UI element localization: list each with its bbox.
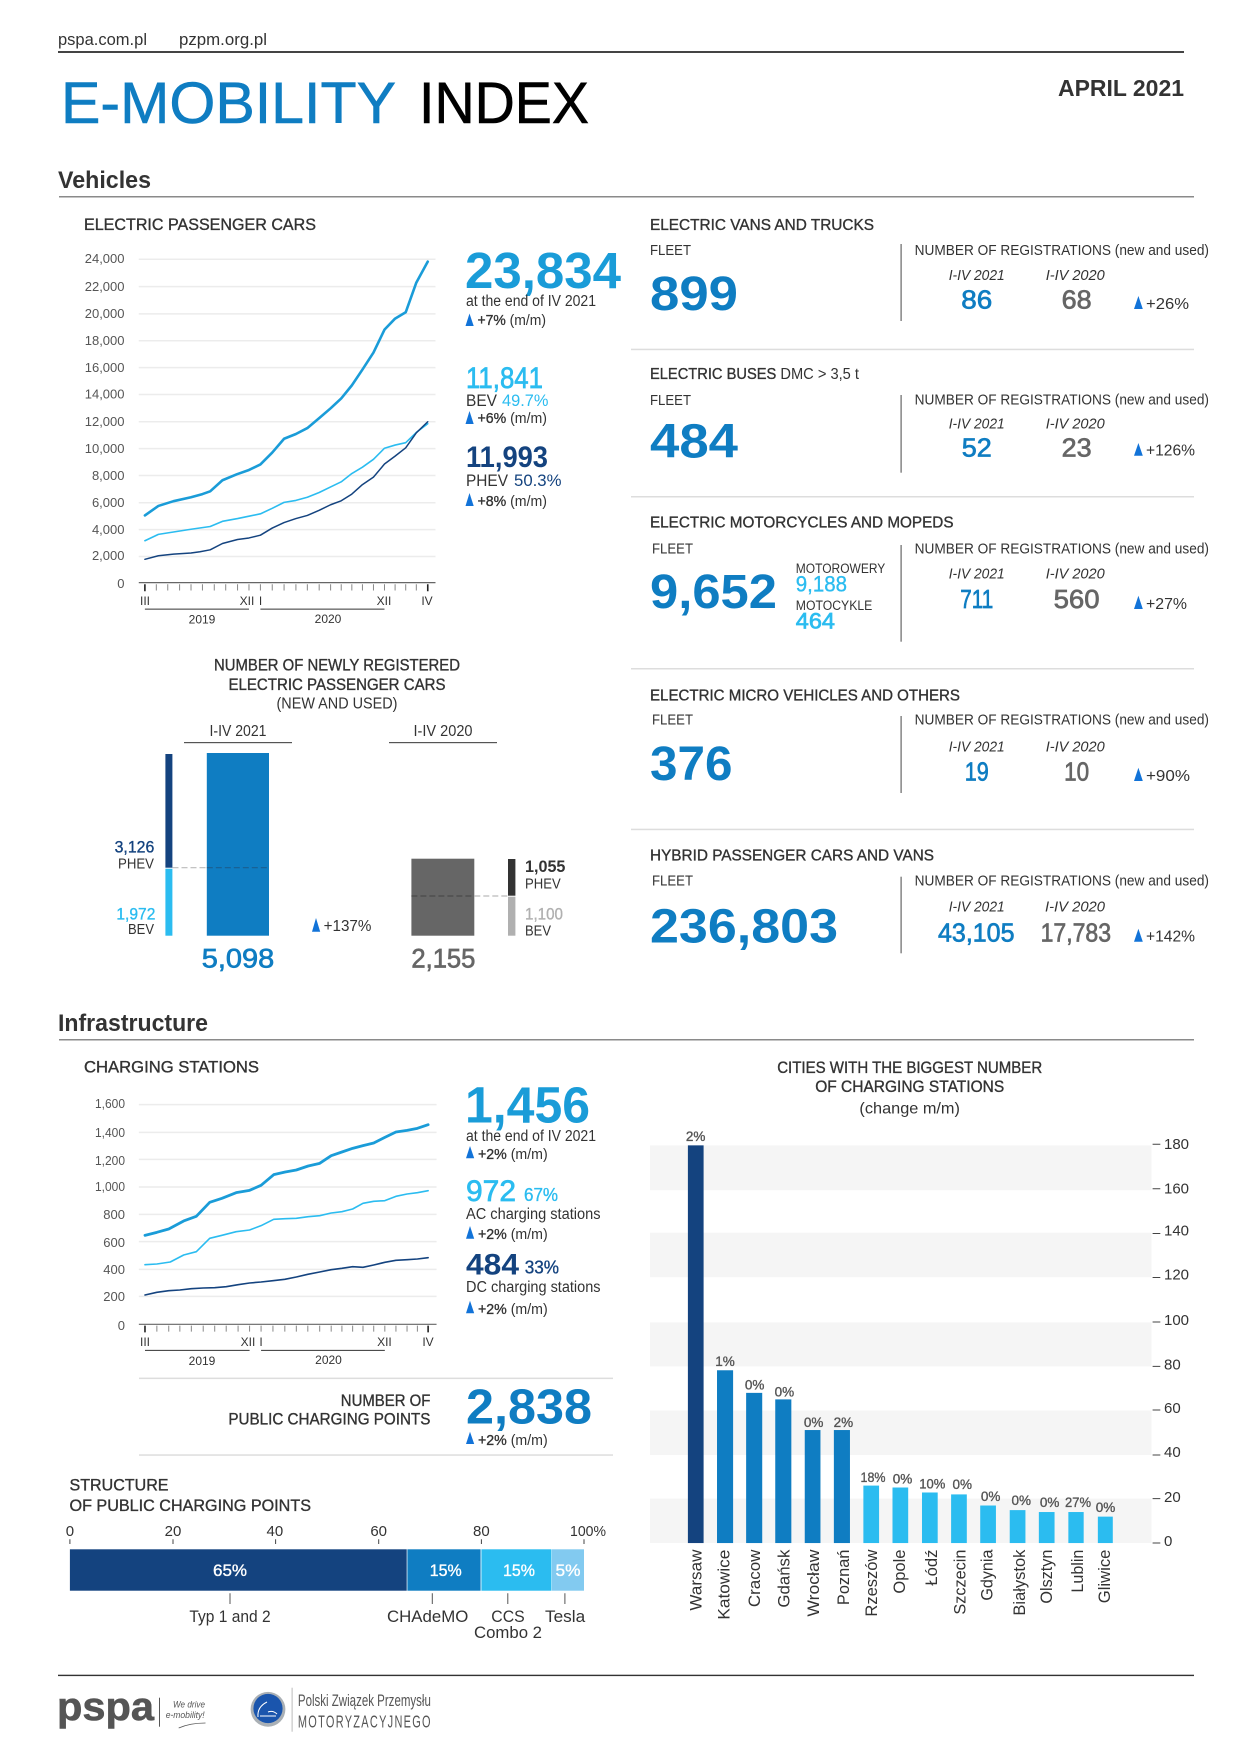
line chart: passenger car fleet: XII bbox=[240, 594, 254, 608]
stat: DC stations 484: +2% (m/m) bbox=[478, 1301, 548, 1318]
line chart: passenger car fleet: XII bbox=[377, 594, 391, 608]
panel: public charging points: PUBLIC CHARGING POINTS bbox=[228, 1410, 430, 1428]
bar chart: cities: Wrocław bbox=[805, 1550, 823, 1617]
heading: newly registered: (NEW AND USED) bbox=[276, 696, 398, 713]
panel: electric vans and trucks: 86 bbox=[961, 284, 992, 314]
bar chart: cities: 0% bbox=[893, 1472, 912, 1487]
panel: electric micro vehicles: FLEET bbox=[652, 712, 693, 728]
bar chart: cities bbox=[650, 1129, 1189, 1620]
stat: BEV 11,841: 49.7% bbox=[502, 392, 549, 410]
panel: electric motorcycles and mopeds: 464 bbox=[796, 609, 835, 634]
panel: electric buses: 23 bbox=[1062, 433, 1092, 463]
bar chart: cities: Łódź bbox=[923, 1550, 941, 1586]
panel: public charging points: NUMBER OF bbox=[341, 1392, 430, 1410]
axis: percent scale: 0 bbox=[66, 1523, 74, 1540]
stat: total stations 1,456 bbox=[465, 1077, 596, 1163]
bar chart: cities: Cracow bbox=[746, 1550, 764, 1607]
panel: hybrid passenger cars and vans: NUMBER OF REGISTRATIONS (new and used) bbox=[915, 872, 1209, 890]
bar chart: cities: 0% bbox=[1096, 1500, 1115, 1515]
bar chart: cities: 40 bbox=[1164, 1444, 1181, 1461]
axis: percent scale: 20 bbox=[165, 1523, 181, 1540]
panel: electric buses: FLEET bbox=[650, 392, 691, 409]
bar labels: Tesla bbox=[545, 1607, 586, 1626]
line chart: passenger car fleet: 24,000 bbox=[85, 251, 124, 266]
panel: electric motorcycles and mopeds: +27% bbox=[1146, 596, 1187, 613]
line chart: charging stations: XII bbox=[241, 1335, 255, 1349]
bar chart: cities: 80 bbox=[1164, 1357, 1181, 1374]
change: +137%: +137% bbox=[324, 918, 371, 935]
panel: structure of public charging points bbox=[66, 1477, 606, 1642]
bar: 2020 registrations: 2,155 bbox=[411, 944, 475, 974]
bar chart: cities: 60 bbox=[1164, 1400, 1181, 1417]
stat: PHEV 11,993: +8% (m/m) bbox=[478, 493, 547, 510]
panel: electric buses: I-IV 2021 bbox=[949, 416, 1005, 432]
line chart: charging stations: 200 bbox=[103, 1289, 125, 1304]
panel: electric vans and trucks: 68 bbox=[1062, 284, 1092, 314]
line chart: passenger car fleet: III bbox=[140, 594, 150, 608]
bar chart: cities: Lublin bbox=[1069, 1550, 1087, 1593]
bar chart: cities: Gdynia bbox=[978, 1549, 996, 1601]
stat: total fleet 23,834: 23,834 bbox=[465, 242, 622, 299]
panel: electric motorcycles and mopeds: I-IV 2021 bbox=[949, 566, 1005, 582]
bar chart: cities: 140 bbox=[1164, 1223, 1189, 1240]
stat: total stations 1,456: 1,456 bbox=[465, 1077, 590, 1134]
line chart: charging stations: 400 bbox=[103, 1262, 125, 1277]
logo: pspa: We drive bbox=[173, 1700, 205, 1710]
stat: total fleet 23,834 bbox=[465, 242, 622, 329]
panel: hybrid passenger cars and vans: I-IV 2020 bbox=[1045, 898, 1106, 916]
panel: electric buses: 484 bbox=[650, 416, 738, 469]
bar chart: cities: Gdańsk bbox=[775, 1549, 793, 1608]
stacked bar: 65% bbox=[213, 1561, 247, 1580]
stat: PHEV 11,993 bbox=[466, 441, 562, 510]
panel: electric micro vehicles: I-IV 2021 bbox=[949, 738, 1005, 756]
bar chart: cities: 120 bbox=[1164, 1267, 1189, 1284]
panel: electric vans and trucks: I-IV 2020 bbox=[1046, 267, 1105, 284]
panel: electric micro vehicles bbox=[650, 688, 1209, 793]
panel: electric buses: 52 bbox=[962, 433, 992, 463]
header links bbox=[58, 31, 267, 49]
panel: electric micro vehicles: 376 bbox=[650, 738, 732, 791]
bar chart: cities: 1% bbox=[715, 1354, 735, 1369]
heading: vehicles: Vehicles bbox=[58, 167, 151, 194]
bar chart: cities: 0% bbox=[981, 1489, 1000, 1504]
line chart: charging stations: XII bbox=[377, 1335, 392, 1349]
line chart: passenger car fleet: 18,000 bbox=[85, 333, 124, 348]
bar chart: cities: 20 bbox=[1164, 1489, 1181, 1506]
panel: electric buses: ELECTRIC BUSES DMC > 3,5 t bbox=[650, 366, 860, 383]
panel: electric motorcycles and mopeds: FLEET bbox=[652, 540, 693, 558]
line chart: passenger car fleet: 0 bbox=[117, 576, 124, 591]
bar chart: cities: 160 bbox=[1164, 1180, 1189, 1198]
bar chart: cities: Opole bbox=[891, 1550, 909, 1594]
stacked bar: 15% bbox=[430, 1561, 462, 1580]
bar: 2021 registrations: BEV bbox=[128, 921, 154, 938]
panel: electric micro vehicles: NUMBER OF REGISTRATIONS (new and used) bbox=[915, 712, 1209, 728]
date: APRIL 2021 bbox=[1058, 75, 1184, 101]
stacked bar: 5% bbox=[556, 1561, 580, 1580]
bar chart: cities: 0% bbox=[1040, 1495, 1059, 1510]
logo: Polski Związek Przemysłu Motoryzacyjnego bbox=[251, 1688, 431, 1733]
line chart: passenger car fleet: 2020 bbox=[315, 612, 342, 626]
stat: BEV 11,841: BEV bbox=[466, 392, 497, 410]
panel: electric buses: I-IV 2020 bbox=[1046, 416, 1105, 432]
line chart: passenger car fleet: 2019 bbox=[189, 612, 216, 626]
axis: percent scale bbox=[66, 1523, 606, 1544]
line chart: charging stations: IV bbox=[422, 1335, 434, 1349]
line chart: passenger car fleet: 10,000 bbox=[85, 441, 124, 456]
panel: electric motorcycles and mopeds: MOTOCYKLE bbox=[796, 598, 872, 613]
panel: electric motorcycles and mopeds: I-IV 2020 bbox=[1046, 566, 1105, 582]
axis: percent scale: 60 bbox=[370, 1523, 387, 1540]
line chart: passenger car fleet: 8,000 bbox=[92, 468, 124, 483]
heading: charging stations: CHARGING STATIONS bbox=[84, 1059, 259, 1077]
logo: pspa: pspa bbox=[57, 1685, 155, 1729]
panel: electric motorcycles and mopeds: ELECTRIC MOTORCYCLES AND MOPEDS bbox=[650, 514, 954, 532]
bar chart: cities: Szczecin bbox=[952, 1550, 970, 1615]
stat: AC stations 972: 67% bbox=[524, 1185, 558, 1205]
panel: electric micro vehicles: 10 bbox=[1064, 757, 1089, 787]
panel: hybrid passenger cars and vans: I-IV 2021 bbox=[949, 898, 1005, 916]
line chart: charging stations: 2020 bbox=[315, 1353, 342, 1367]
stat: DC stations 484: DC charging stations bbox=[466, 1279, 601, 1296]
panel: electric buses bbox=[650, 366, 1209, 473]
panel: hybrid passenger cars and vans: 236,803 bbox=[650, 900, 838, 954]
heading: structure: STRUCTURE bbox=[70, 1477, 168, 1495]
bar: 2021 registrations: 1,972 bbox=[116, 904, 155, 923]
bar chart: cities: Poznań bbox=[835, 1550, 853, 1605]
panel: hybrid passenger cars and vans: +142% bbox=[1146, 929, 1195, 946]
header links: pzpm.org.pl bbox=[179, 31, 267, 49]
panel: electric micro vehicles: ELECTRIC MICRO VEHICLES AND OTHERS bbox=[650, 688, 960, 704]
bar chart: cities: 27% bbox=[1065, 1495, 1091, 1510]
stat: total fleet 23,834: at the end of IV 2021 bbox=[466, 293, 596, 310]
panel: electric motorcycles and mopeds: 560 bbox=[1054, 584, 1100, 614]
stacked bar bbox=[70, 1549, 584, 1591]
bar chart: cities: Katowice bbox=[715, 1550, 733, 1620]
stacked bar: 15% bbox=[503, 1561, 535, 1580]
bar chart: cities: Gliwice bbox=[1096, 1550, 1114, 1603]
bar chart: cities: 2% bbox=[686, 1129, 705, 1144]
stat: DC stations 484: 33% bbox=[525, 1258, 559, 1278]
panel: hybrid passenger cars and vans: 43,105 bbox=[938, 918, 1014, 948]
line chart: passenger car fleet: 16,000 bbox=[85, 360, 124, 375]
heading: newly registered: NUMBER OF NEWLY REGISTERED bbox=[214, 657, 460, 675]
panel: hybrid passenger cars and vans: FLEET bbox=[652, 872, 693, 890]
heading: newly registered: ELECTRIC PASSENGER CARS bbox=[228, 676, 446, 694]
column header: I-IV 2021: I-IV 2021 bbox=[210, 723, 266, 740]
stat: DC stations 484 bbox=[466, 1248, 601, 1318]
bar chart: cities: Olsztyn bbox=[1038, 1550, 1056, 1604]
heading: cities bbox=[777, 1059, 1042, 1118]
stat: AC stations 972 bbox=[466, 1175, 601, 1243]
line chart: passenger car fleet: 4,000 bbox=[92, 522, 124, 537]
panel: electric vans and trucks bbox=[650, 217, 1209, 321]
line chart: charging stations: 1,600 bbox=[95, 1096, 125, 1111]
stat: BEV 11,841: +6% (m/m) bbox=[478, 410, 547, 427]
bar: 2020 registrations: BEV bbox=[525, 922, 551, 939]
bar chart: cities: 100 bbox=[1164, 1312, 1189, 1329]
header links: pspa.com.pl bbox=[58, 31, 147, 49]
stat: PHEV 11,993: 50.3% bbox=[514, 472, 562, 490]
title bbox=[61, 71, 589, 136]
bar chart: cities: 18% bbox=[860, 1470, 886, 1485]
bar labels: Combo 2 bbox=[474, 1623, 542, 1642]
bar labels: CHAdeMO bbox=[387, 1607, 468, 1626]
line chart: charging stations: 0 bbox=[118, 1318, 125, 1333]
heading: cities: CITIES WITH THE BIGGEST NUMBER bbox=[777, 1059, 1042, 1077]
bar: 2020 registrations: 1,055 bbox=[525, 857, 565, 876]
panel: hybrid passenger cars and vans: HYBRID PASSENGER CARS AND VANS bbox=[650, 848, 934, 864]
line chart: passenger car fleet: 20,000 bbox=[85, 306, 124, 321]
panel: electric buses: +126% bbox=[1146, 443, 1195, 460]
title: INDEX bbox=[419, 71, 589, 136]
bar chart: cities: 180 bbox=[1164, 1136, 1189, 1153]
line chart: passenger car fleet: 22,000 bbox=[85, 279, 124, 294]
title: E-MOBILITY bbox=[61, 71, 396, 136]
heading: cities: (change m/m) bbox=[859, 1101, 960, 1118]
bar: 2020 registrations: 1,100 bbox=[525, 904, 563, 923]
column header: I-IV 2020 bbox=[389, 723, 497, 743]
line chart: passenger car fleet bbox=[85, 251, 436, 626]
stat: PHEV 11,993: PHEV bbox=[466, 472, 508, 490]
line chart: charging stations bbox=[95, 1096, 437, 1368]
panel: hybrid passenger cars and vans: 17,783 bbox=[1041, 918, 1111, 948]
panel: electric micro vehicles: +90% bbox=[1146, 768, 1190, 785]
bar: 2021 registrations: 3,126 bbox=[115, 838, 154, 857]
bar chart: cities: 2% bbox=[834, 1415, 853, 1430]
panel: cities with the biggest number of stations bbox=[650, 1059, 1189, 1620]
line chart: charging stations: 1,200 bbox=[95, 1153, 125, 1168]
bar chart: cities: Warsaw bbox=[687, 1550, 705, 1611]
line chart: charging stations: 800 bbox=[103, 1207, 125, 1222]
heading: structure: OF PUBLIC CHARGING POINTS bbox=[70, 1497, 311, 1515]
bar chart: cities: 0% bbox=[1011, 1493, 1031, 1508]
bar: 2021 registrations: PHEV bbox=[118, 856, 154, 873]
panel: electric motorcycles and mopeds: NUMBER OF REGISTRATIONS (new and used) bbox=[915, 540, 1209, 558]
panel: electric passenger cars bbox=[84, 216, 622, 626]
panel: electric vans and trucks: 899 bbox=[650, 268, 738, 321]
line chart: passenger car fleet: 14,000 bbox=[85, 386, 124, 402]
stat: AC stations 972: AC charging stations bbox=[466, 1206, 601, 1223]
line chart: passenger car fleet: 2,000 bbox=[92, 548, 124, 563]
panel: newly registered passenger cars bbox=[115, 657, 565, 974]
bar: 2020 registrations: PHEV bbox=[525, 876, 561, 893]
heading: infrastructure: Infrastructure bbox=[58, 1010, 208, 1037]
panel: electric buses: NUMBER OF REGISTRATIONS (new and used) bbox=[915, 392, 1209, 408]
panel: electric micro vehicles: 19 bbox=[965, 757, 989, 787]
bar labels bbox=[189, 1593, 586, 1642]
panel: hybrid passenger cars and vans bbox=[650, 848, 1209, 954]
stat: BEV 11,841: 11,841 bbox=[466, 362, 543, 395]
panel: electric vans and trucks: +26% bbox=[1146, 296, 1189, 313]
panel: electric motorcycles and mopeds: 711 bbox=[960, 584, 993, 614]
bar chart: cities: Rzeszów bbox=[863, 1550, 881, 1617]
bar labels: CCS bbox=[491, 1607, 525, 1626]
line chart: charging stations: 600 bbox=[103, 1235, 125, 1250]
panel: charging stations bbox=[84, 1059, 601, 1368]
bar chart: cities: 0% bbox=[952, 1477, 972, 1492]
line chart: charging stations: I bbox=[259, 1335, 263, 1349]
line chart: charging stations: III bbox=[140, 1335, 150, 1349]
stat: BEV 11,841 bbox=[466, 362, 549, 427]
bar chart: cities: Białystok bbox=[1011, 1549, 1029, 1616]
logo: Polski Związek Przemysłu Motoryzacyjnego: Polski Związek Przemysłu bbox=[298, 1691, 431, 1710]
heading: structure bbox=[70, 1477, 311, 1515]
line chart: charging stations: 2019 bbox=[189, 1354, 216, 1368]
bar chart: cities: 10% bbox=[919, 1476, 945, 1491]
column header: I-IV 2021 bbox=[184, 723, 292, 743]
axis: percent scale: 80 bbox=[473, 1523, 490, 1540]
heading: newly registered bbox=[214, 657, 460, 713]
axis: percent scale: 100% bbox=[570, 1523, 606, 1540]
panel: public charging points bbox=[228, 1381, 592, 1449]
panel: electric motorcycles and mopeds: 9,652 bbox=[650, 566, 777, 619]
panel: public charging points: +2% (m/m) bbox=[478, 1432, 548, 1449]
stat: AC stations 972: +2% (m/m) bbox=[478, 1226, 548, 1243]
panel: electric micro vehicles: I-IV 2020 bbox=[1046, 738, 1105, 756]
line chart: charging stations: 1,400 bbox=[95, 1125, 125, 1140]
panel: electric vans and trucks: I-IV 2021 bbox=[949, 267, 1005, 284]
panel: electric motorcycles and mopeds bbox=[650, 514, 1209, 642]
line chart: charging stations: 1,000 bbox=[95, 1179, 125, 1194]
bar chart: cities: 0% bbox=[745, 1377, 764, 1392]
stat: total stations 1,456: +2% (m/m) bbox=[478, 1146, 548, 1163]
panel: public charging points: 2,838 bbox=[466, 1381, 592, 1435]
bar: 2021 registrations: 5,098 bbox=[202, 944, 274, 974]
heading: cities: OF CHARGING STATIONS bbox=[815, 1078, 1004, 1096]
stat: AC stations 972: 972 bbox=[466, 1175, 516, 1208]
bar: 2020 registrations bbox=[411, 857, 565, 974]
axis: percent scale: 40 bbox=[267, 1523, 283, 1540]
line chart: passenger car fleet: I bbox=[259, 594, 262, 608]
heading: electric passenger cars: ELECTRIC PASSENGER CARS bbox=[84, 216, 316, 234]
stat: total fleet 23,834: +7% (m/m) bbox=[478, 312, 546, 329]
logo: pspa: e-mobility! bbox=[166, 1710, 205, 1720]
panel: electric vans and trucks: FLEET bbox=[650, 242, 691, 259]
logo: Polski Związek Przemysłu Motoryzacyjnego: MOTORYZACYJNEGO bbox=[298, 1713, 431, 1733]
bar chart: cities: 0% bbox=[804, 1415, 823, 1430]
panel: electric vans and trucks: NUMBER OF REGISTRATIONS (new and used) bbox=[915, 242, 1209, 259]
logo: pspa bbox=[57, 1685, 206, 1729]
bar chart: cities: 0 bbox=[1164, 1533, 1172, 1550]
stat: total stations 1,456: at the end of IV 2021 bbox=[466, 1128, 596, 1145]
bar: 2021 registrations bbox=[115, 753, 274, 974]
line chart: passenger car fleet: IV bbox=[421, 594, 433, 608]
line chart: passenger car fleet: 12,000 bbox=[85, 414, 124, 429]
line chart: passenger car fleet: 6,000 bbox=[92, 495, 124, 510]
bar labels: Typ 1 and 2 bbox=[189, 1607, 271, 1626]
panel: electric motorcycles and mopeds: MOTOROWERY bbox=[796, 561, 885, 576]
panel: electric vans and trucks: ELECTRIC VANS AND TRUCKS bbox=[650, 217, 874, 234]
stat: DC stations 484: 484 bbox=[466, 1248, 520, 1281]
bar chart: cities: 0% bbox=[775, 1384, 794, 1399]
column header: I-IV 2020: I-IV 2020 bbox=[414, 723, 473, 740]
stat: PHEV 11,993: 11,993 bbox=[466, 441, 548, 474]
panel: electric motorcycles and mopeds: 9,188 bbox=[796, 572, 847, 597]
